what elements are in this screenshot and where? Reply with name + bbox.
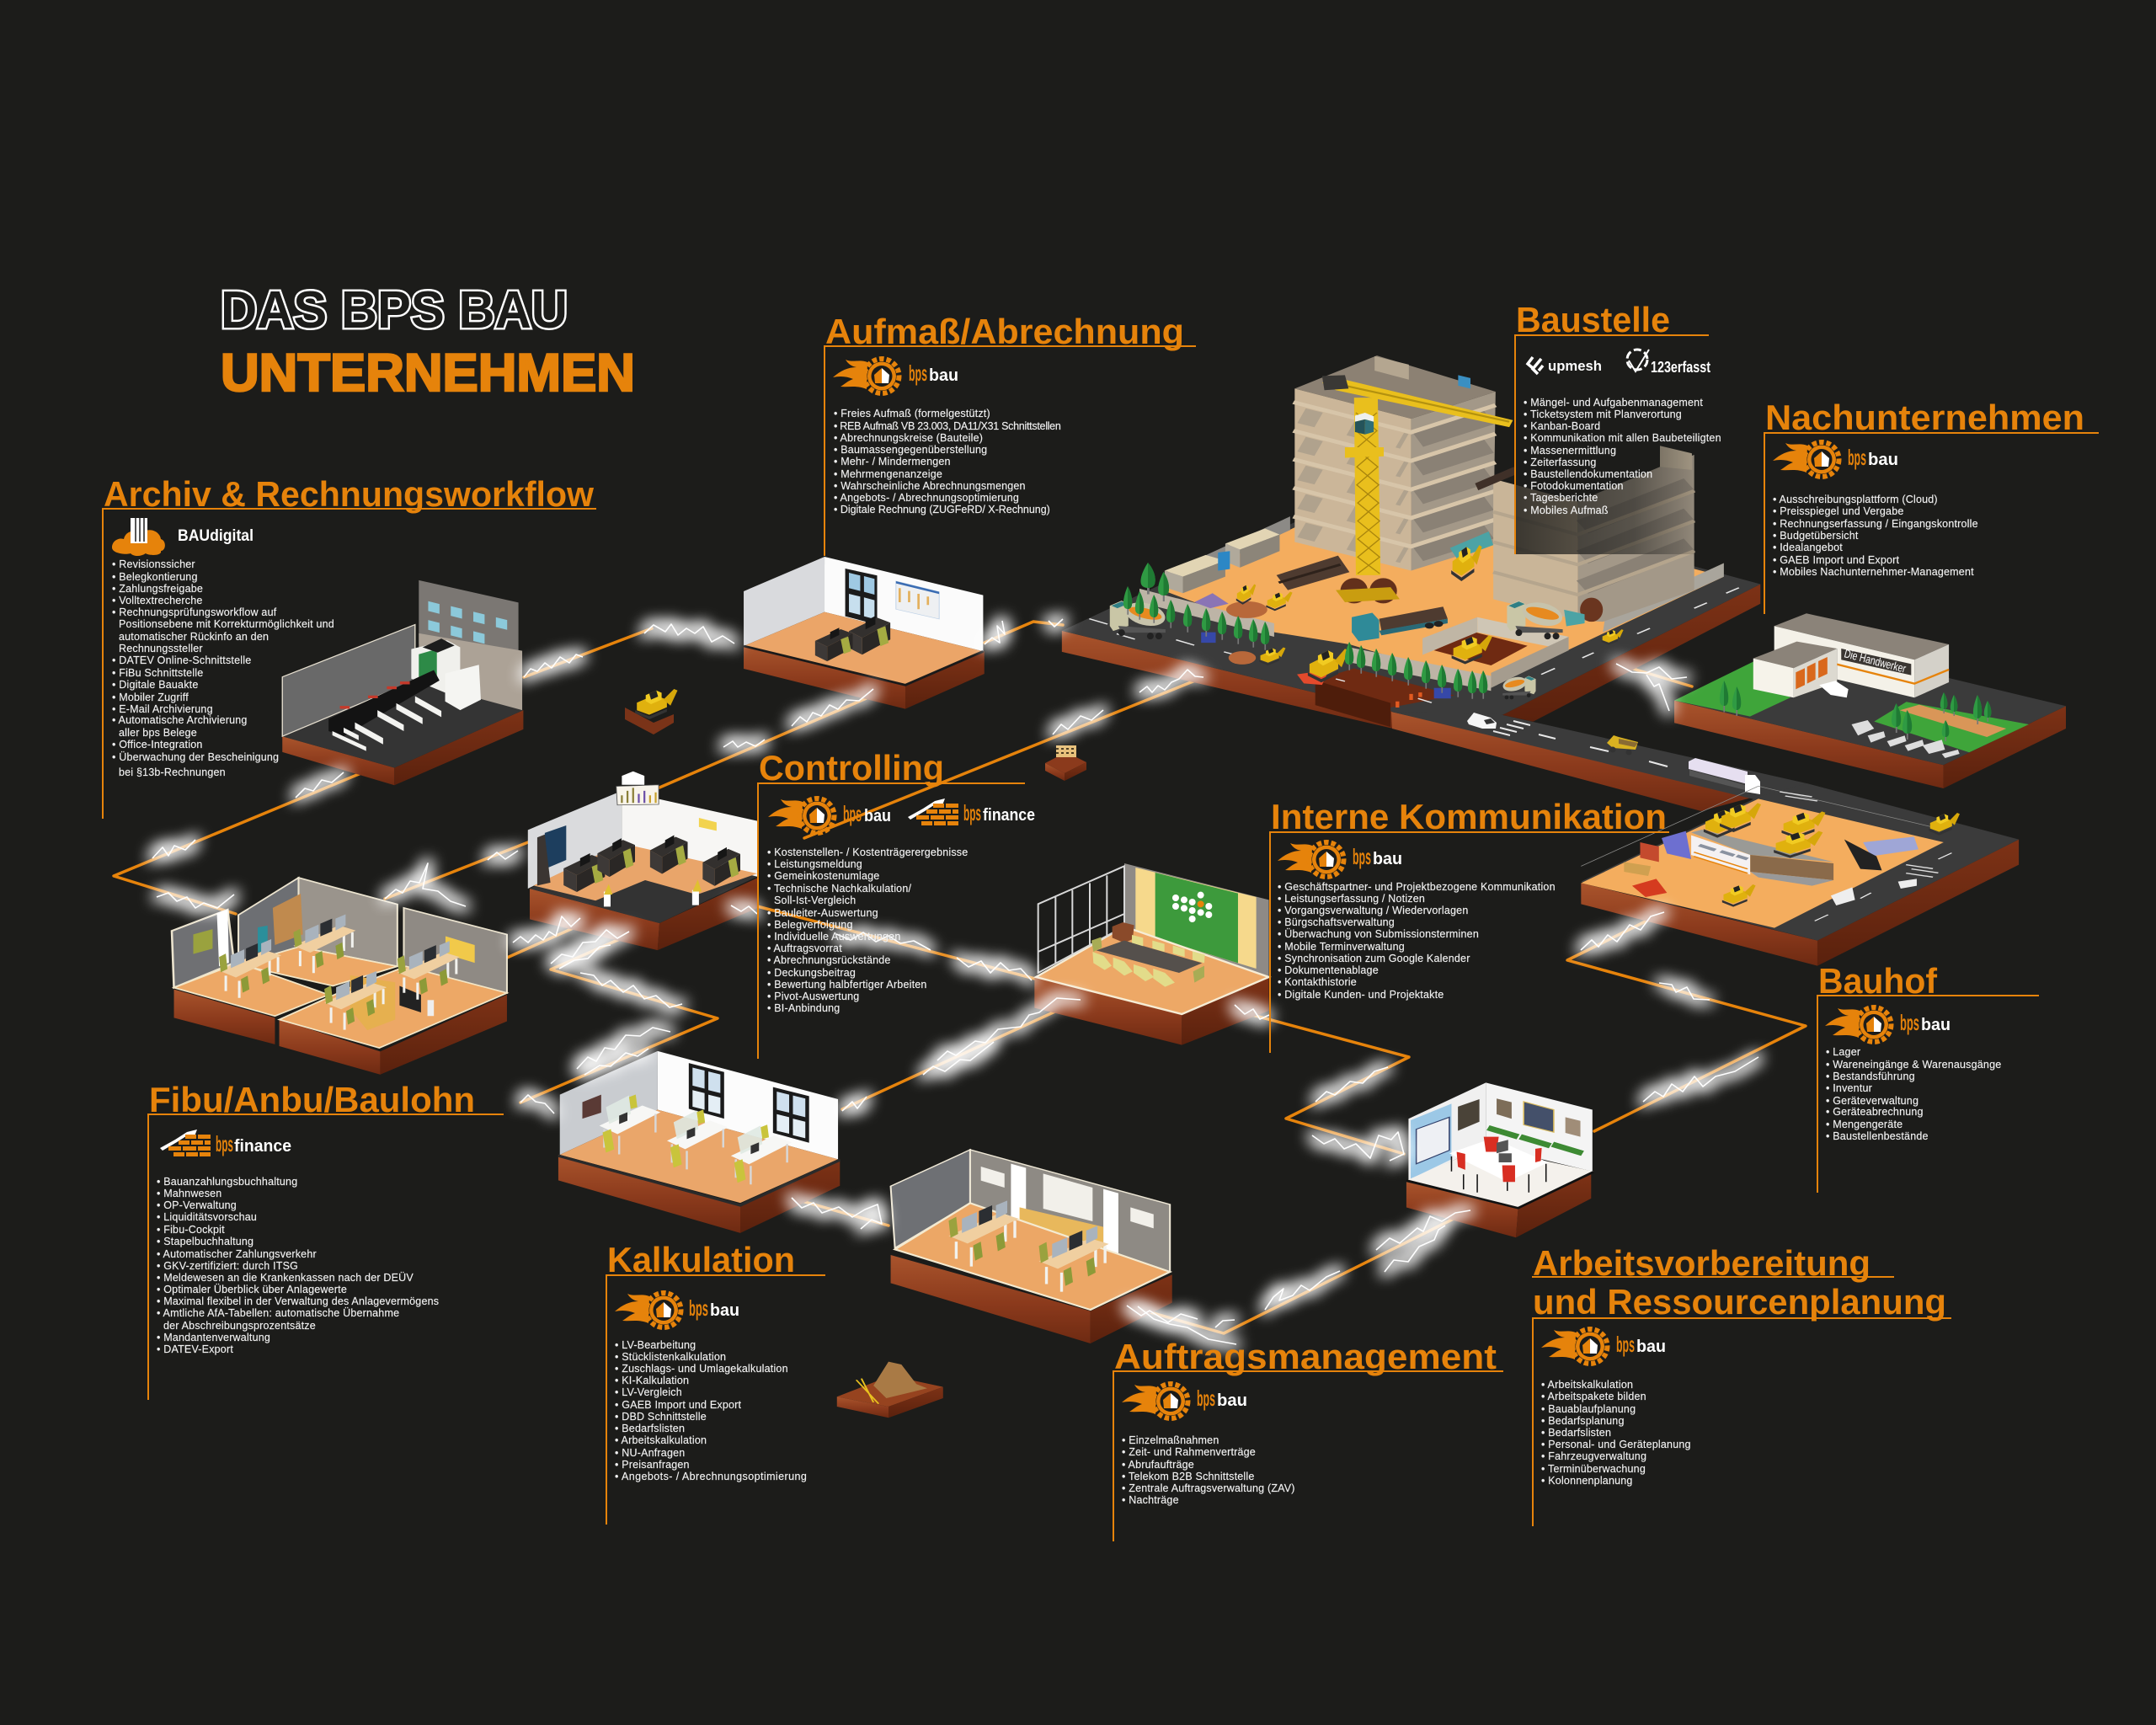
- feature list: • Geschäftspartner- und Projektbezogene Kommunikation: [1278, 881, 1556, 893]
- panel: Aufmaß/Abrechnung: [825, 312, 1196, 556]
- title: UNTERNEHMEN: [221, 344, 635, 403]
- feature list: • Fahrzeugverwaltung: [1541, 1450, 1646, 1462]
- feature list: • Dokumentenablage: [1278, 964, 1379, 976]
- feature list: automatischer Rückinfo an den: [119, 631, 269, 643]
- feature list: [1541, 1379, 1691, 1487]
- panel: Kalkulation: [606, 1240, 825, 1525]
- heading: Interne Kommunikation: [1271, 797, 1667, 836]
- feature list: • Bedarfslisten: [1541, 1427, 1611, 1439]
- feature list: • Bedarfsplanung: [1541, 1415, 1625, 1427]
- feature list: • NU-Anfragen: [615, 1447, 685, 1459]
- sand yard: [1581, 798, 1944, 928]
- truck: [1689, 758, 1760, 794]
- lawns: [1674, 661, 2029, 752]
- feature list: • Meldewesen an die Krankenkassen nach der DEÜV: [157, 1272, 414, 1284]
- desks: [948, 1200, 1109, 1292]
- feature list: • Überwachung der Bescheinigung: [112, 751, 279, 763]
- feature list: • Automatische Archivierung: [112, 714, 248, 726]
- panel: Archiv & Rechnungsworkflow: [103, 474, 596, 819]
- floor: [744, 612, 983, 685]
- feature list: • DATEV Online-Schnittstelle: [112, 654, 251, 666]
- feature list: • Preisspiegel und Vergabe: [1773, 505, 1904, 517]
- feature list: • Zahlungsfreigabe: [112, 583, 203, 595]
- feature list: • Geräteverwaltung: [1826, 1095, 1919, 1107]
- slab: [530, 843, 757, 923]
- logo: bps finance: finance: [234, 1137, 291, 1156]
- feature list: • Stapelbuchhaltung: [157, 1236, 253, 1247]
- feature list: [157, 1176, 439, 1355]
- feature list: • Stücklistenkalkulation: [615, 1351, 726, 1363]
- slab: [1674, 654, 2066, 788]
- windows: [583, 1063, 809, 1143]
- feature list: • Vorgangsverwaltung / Wiedervorlagen: [1278, 905, 1468, 916]
- floor: [1036, 927, 1269, 1014]
- diorama: Bauhof: [1581, 783, 2019, 966]
- floor: [895, 1203, 1170, 1310]
- feature list: • Abrechnungsrückstände: [767, 954, 891, 966]
- window cabinet: [537, 825, 566, 885]
- feature list: • Bedarfslisten: [615, 1423, 685, 1434]
- feature list: • Automatischer Zahlungsverkehr: [157, 1248, 317, 1260]
- overlay: Baustelle text panel: [1515, 335, 1713, 554]
- excavated pit: [1315, 669, 1454, 727]
- feature list: • FiBu Schnittstelle: [112, 667, 203, 679]
- logo: BAUdigital: BAUdigital: [178, 527, 253, 545]
- feature list: • Baustellenbestände: [1826, 1130, 1929, 1142]
- logo: bps bau: [1122, 1384, 1247, 1418]
- feature list: Positionsebene mit Korrekturmöglichkeit und: [119, 618, 334, 630]
- diorama: Baustelle construction site: [1062, 355, 1760, 729]
- feature list: • DATEV-Export: [157, 1343, 233, 1355]
- sand site ground: [1162, 486, 1724, 686]
- feature list: • Bewertung halbfertiger Arbeiten: [767, 979, 927, 991]
- feature list: • Personal- und Geräteplanung: [1541, 1439, 1691, 1450]
- feature list: • Bauleiter-Auswertung: [767, 907, 878, 919]
- feature list: • Digitale Kunden- und Projektakte: [1278, 989, 1444, 1001]
- logo: bps bau: bps: [843, 801, 862, 826]
- feature list: • Technische Nachkalkulation/: [767, 883, 911, 895]
- walls: [891, 1150, 1170, 1272]
- logo: bps finance: finance: [983, 806, 1035, 825]
- logo: bps bau: bps: [689, 1295, 708, 1321]
- feature list: [1278, 881, 1556, 1001]
- logo: bps bau: [1278, 842, 1402, 877]
- tree rows: [1123, 563, 1487, 699]
- title: DAS BPS BAU: [221, 281, 568, 339]
- feature list: • Rechnungserfassung / Eingangskontrolle: [1773, 518, 1978, 530]
- white van: [1467, 713, 1497, 729]
- window: [846, 569, 878, 625]
- feature list: • Revisionssicher: [112, 558, 195, 570]
- pipe truck: [1352, 606, 1448, 641]
- second building: [1493, 446, 1694, 622]
- feature list: • Individuelle Auswertungen: [767, 931, 901, 943]
- feature list: • Telekom B2B Schnittstelle: [1122, 1471, 1255, 1482]
- logo: bps bau: bps: [1197, 1386, 1215, 1411]
- feature list: • Geräteabrechnung: [1826, 1106, 1924, 1118]
- feature list: • GKV-zertifiziert: durch ITSG: [157, 1260, 298, 1272]
- feature list: • Digitale Bauakte: [112, 679, 198, 691]
- feature list: • GAEB Import und Export: [615, 1399, 742, 1411]
- logo: bps bau: bau: [710, 1301, 739, 1320]
- feature list: • Budgetübersicht: [1773, 530, 1859, 542]
- walls: [282, 580, 522, 736]
- feature list: • Tagesberichte: [1524, 492, 1598, 504]
- feature list: • Maximal flexibel in der Verwaltung des Anlagevermögens: [157, 1295, 439, 1307]
- soil: [1034, 977, 1269, 1045]
- road markings: [1089, 588, 1739, 702]
- feature list: • Kostenstellen- / Kostenträgerergebnisse: [767, 846, 968, 858]
- feature list: • Gemeinkostenumlage: [767, 870, 879, 882]
- heading: Nachunternehmen: [1765, 398, 2084, 437]
- diorama: road to Bauhof: [1391, 712, 1806, 811]
- feature list: • Einzelmaßnahmen: [1122, 1434, 1219, 1446]
- diorama: Kalkulation room: [558, 1051, 840, 1233]
- feature list: • Mobiles Nachunternehmer-Management: [1773, 566, 1974, 578]
- feature list: • Bauanzahlungsbuchhaltung: [157, 1176, 297, 1188]
- feature list: • Office-Integration: [112, 739, 203, 750]
- feature list: • Angebots- / Abrechnungsoptimierung: [834, 492, 1019, 504]
- sideboard: [350, 975, 434, 1030]
- feature list: [1773, 494, 1978, 578]
- slab asphalt: [1581, 783, 2019, 941]
- tile: excavator: [625, 689, 677, 734]
- feature list: • Massenermittlung: [1524, 445, 1616, 457]
- soil: [558, 1155, 840, 1233]
- feature list: [1524, 397, 1721, 516]
- logo: bps bau: bps: [1353, 844, 1371, 869]
- feature list: • Ausschreibungsplattform (Cloud): [1773, 494, 1938, 505]
- feature list: • Digitale Rechnung (ZUGFeRD/ X-Rechnung): [834, 504, 1050, 515]
- scanning machine: [328, 638, 481, 751]
- wood floor: [533, 843, 757, 900]
- diorama: conference room: [1034, 863, 1269, 1045]
- feature list: • REB Aufmaß VB 23.003, DA11/X31 Schnittstellen: [834, 420, 1061, 432]
- feature list: • Auftragsvorrat: [767, 943, 842, 954]
- feature list: • Amtliche AfA-Tabellen: automatische Übernahme: [157, 1307, 399, 1319]
- feature list: • LV-Vergleich: [615, 1386, 682, 1398]
- logo: bps bau: bau: [1921, 1016, 1951, 1034]
- feature list: • DBD Schnittstelle: [615, 1411, 707, 1423]
- feature list: • Zentrale Auftragsverwaltung (ZAV): [1122, 1482, 1295, 1494]
- soil: [174, 990, 507, 1075]
- feature list: • Volltextrecherche: [112, 595, 203, 606]
- feature list: • Mängel- und Aufgabenmanagement: [1524, 397, 1703, 409]
- feature list: • Kontakthistorie: [1278, 976, 1357, 988]
- logo: bps finance: [160, 1130, 291, 1156]
- feature list: • Belegverfolgung: [767, 919, 853, 931]
- table and chairs: [1091, 935, 1205, 987]
- feature list: • Mehrmengenanzeige: [834, 468, 942, 480]
- diorama: Archiv: [282, 580, 523, 785]
- feature list: • GAEB Import und Export: [1773, 554, 1900, 566]
- feature list: [767, 846, 968, 1014]
- company sign: Die Handwerker: [1843, 646, 1908, 676]
- feature list: • Freies Aufmaß (formelgestützt): [834, 408, 990, 419]
- tile: barrier: [1045, 745, 1086, 781]
- yard fence: [1581, 786, 1944, 866]
- panel: Auftragsmanagement: [1113, 1337, 1503, 1541]
- feature list: • Deckungsbeitrag: [767, 967, 856, 979]
- heading: Fibu/Anbu/Baulohn: [149, 1080, 475, 1119]
- feature list: • Belegkontierung: [112, 571, 198, 583]
- feature list: • Rechnungsprüfungsworkflow auf: [112, 606, 277, 618]
- heading: und Ressourcenplanung: [1533, 1282, 1946, 1322]
- logo: bps bau: bau: [864, 807, 891, 825]
- logo: bps bau: [1773, 442, 1898, 477]
- floor: [560, 1109, 838, 1203]
- feature list: Soll-Ist-Vergleich: [774, 895, 856, 906]
- feature list: • Kanban-Board: [1524, 420, 1600, 432]
- heading: Auftragsmanagement: [1114, 1337, 1497, 1376]
- logo: bps bau: bau: [1217, 1391, 1247, 1410]
- tall building: [1294, 355, 1496, 570]
- dump truck: [1607, 735, 1638, 755]
- logo: bps bau: [1541, 1329, 1666, 1364]
- logo: bps bau: [768, 798, 891, 833]
- tile floor: [1406, 1147, 1593, 1208]
- feature list: • KI-Kalkulation: [615, 1375, 689, 1386]
- feature list: • Inventur: [1826, 1082, 1872, 1094]
- cars: [1852, 720, 1960, 758]
- warehouse: [1624, 830, 1833, 897]
- site slab asphalt: [1062, 482, 1760, 722]
- walls: [172, 878, 507, 993]
- trees at Nachunternehmen: [1720, 681, 1991, 741]
- diorama: Auftragsmanagement room: [891, 1150, 1172, 1343]
- building: [1753, 613, 1949, 697]
- panel: Fibu/Anbu/Baulohn: [148, 1080, 504, 1400]
- panel: Nachunternehmen: [1764, 398, 2099, 614]
- feature list: • Mahnwesen: [157, 1188, 221, 1199]
- feature list: • Terminüberwachung: [1541, 1463, 1646, 1475]
- desks: [815, 616, 890, 661]
- logo: bps bau: bau: [1636, 1338, 1666, 1356]
- feature list: • Bauablaufplanung: [1541, 1403, 1636, 1415]
- desks: [600, 1095, 792, 1184]
- feature list: • Kolonnenplanung: [1541, 1475, 1633, 1487]
- feature list: • Leistungserfassung / Notizen: [1278, 893, 1425, 905]
- feature list: • Bestandsführung: [1826, 1071, 1915, 1082]
- feature list: • BI-Anbindung: [767, 1002, 840, 1014]
- feature list: • Optimaler Überblick über Anlagewerte: [157, 1284, 347, 1295]
- feature list: bei §13b-Rechnungen: [119, 766, 226, 778]
- soil: [891, 1255, 1172, 1343]
- feature list: [834, 408, 1061, 515]
- machinery: [1704, 803, 1960, 907]
- feature list: • Kommunikation mit allen Baubeteiligten: [1524, 432, 1721, 444]
- feature list: • Zeit- und Rahmenverträge: [1122, 1446, 1256, 1458]
- feature list: • Mobiler Zugriff: [112, 692, 189, 703]
- logo: bps bau: bps: [1900, 1010, 1919, 1035]
- glass wall: [1038, 866, 1124, 973]
- feature list: [112, 558, 334, 778]
- diorama: Controlling room: [528, 772, 757, 950]
- logo: 123erfasst: [1627, 350, 1710, 376]
- feature list: • Fotodokumentation: [1524, 480, 1624, 492]
- heading: Aufmaß/Abrechnung: [825, 312, 1184, 351]
- feature list: • OP-Verwaltung: [157, 1199, 237, 1211]
- feature list: • Nachträge: [1122, 1494, 1179, 1506]
- slab soil: [1581, 840, 2019, 966]
- feature list: der Abschreibungsprozentsätze: [163, 1320, 316, 1332]
- logo: upmesh: upmesh: [1548, 358, 1602, 374]
- feature list: • E-Mail Archivierung: [112, 703, 213, 715]
- feature list: • Zeiterfassung: [1524, 457, 1597, 468]
- feature list: • Mehr- / Mindermengen: [834, 456, 951, 467]
- logo: bps bau: bau: [1868, 451, 1898, 469]
- heading: Controlling: [759, 748, 944, 788]
- feature list: [615, 1339, 807, 1482]
- feature list: • Ticketsystem mit Planverortung: [1524, 409, 1682, 420]
- logo: bps bau: bau: [929, 366, 958, 385]
- feature list: • Liquiditätsvorschau: [157, 1211, 257, 1223]
- feature list: • Überwachung von Submissionsterminen: [1278, 928, 1479, 940]
- walls: [744, 557, 983, 651]
- panel: Controlling: [758, 748, 1035, 1059]
- heading: [1533, 1243, 1946, 1322]
- logo: bps finance: bps: [216, 1131, 233, 1156]
- feature list: • Wahrscheinliche Abrechnungsmengen: [834, 480, 1026, 492]
- building pit with retaining walls: [1422, 617, 1569, 688]
- back wall: [1124, 863, 1269, 977]
- feature list: • Angebots- / Abrechnungsoptimierung: [615, 1471, 807, 1482]
- wall chart: [896, 581, 939, 619]
- feature list: • Baustellendokumentation: [1524, 468, 1652, 480]
- feature list: • Abrufaufträge: [1122, 1459, 1194, 1471]
- chart board: [616, 772, 659, 805]
- diorama: Nachunternehmen: [1674, 613, 2066, 788]
- heading: Kalkulation: [607, 1240, 795, 1279]
- wood floors: [174, 947, 507, 1048]
- desks and plants: [563, 818, 740, 906]
- desk and red chairs: [1449, 1137, 1548, 1193]
- logo: bps bau: bps: [1848, 445, 1866, 470]
- site slab soil: [1062, 585, 1760, 729]
- feature list: • Zuschlags- und Umlagekalkulation: [615, 1363, 788, 1375]
- feature list: • Fibu-Cockpit: [157, 1224, 225, 1236]
- soil: [282, 710, 523, 785]
- panel: Baustelle: [1515, 300, 1721, 554]
- tower crane: [1322, 375, 1513, 602]
- logo: bps finance: bps: [963, 800, 981, 825]
- heading: Archiv & Rechnungsworkflow: [104, 474, 594, 514]
- walls: [528, 791, 757, 889]
- logo: 123erfasst: 123erfasst: [1651, 359, 1710, 376]
- machines: [1110, 545, 1624, 708]
- feature list: • Arbeitskalkulation: [615, 1434, 707, 1446]
- feature list: Rechnungssteller: [119, 643, 203, 654]
- walls: [560, 1051, 838, 1159]
- back fence: [1162, 516, 1724, 633]
- logo: bps bau: bps: [909, 360, 927, 386]
- logo: bps bau: [833, 359, 958, 393]
- desks: [219, 915, 460, 1030]
- panel: Bauhof: [1817, 961, 2039, 1193]
- logo: bps bau: bps: [1616, 1332, 1635, 1357]
- feature list: • Mengengeräte: [1826, 1119, 1903, 1130]
- feature list: • Leistungsmeldung: [767, 858, 862, 870]
- lightning bolts: [152, 619, 1758, 1344]
- feature list: • Synchronisation zum Google Kalender: [1278, 953, 1470, 964]
- logo: bps bau: [1825, 1007, 1951, 1042]
- logo dots: [1172, 892, 1212, 922]
- panel: Arbeitsvorbereitung und Ressourcenplanung: [1532, 1243, 1951, 1526]
- heading: Bauhof: [1818, 961, 1938, 1001]
- diorama: Aufmaß room: [744, 557, 985, 709]
- floor: [282, 681, 523, 768]
- feature list: • Arbeitskalkulation: [1541, 1379, 1633, 1391]
- feature list: • Pivot-Auswertung: [767, 991, 859, 1002]
- site containers and pipes: [1165, 467, 1603, 685]
- logo: upmesh: [1528, 357, 1602, 374]
- walls: [1408, 1082, 1593, 1180]
- front fences: [1139, 589, 1491, 691]
- feature list: • Preisanfragen: [615, 1459, 690, 1471]
- panel: Interne Kommunikation: [1270, 797, 1669, 1053]
- feature list: [1122, 1434, 1295, 1506]
- feature list: aller bps Belege: [119, 727, 197, 739]
- heading: Arbeitsvorbereitung: [1533, 1243, 1870, 1283]
- chest: [1113, 922, 1134, 943]
- feature list: • Lager: [1826, 1046, 1860, 1058]
- feature list: • Wareneingänge & Warenausgänge: [1826, 1059, 2001, 1071]
- soil: [1406, 1174, 1591, 1237]
- feature list: • Mobile Terminverwaltung: [1278, 941, 1405, 953]
- logo: bps bau: bau: [1373, 850, 1402, 868]
- connection lines: [114, 622, 1806, 1333]
- feature list: • Idealangebot: [1773, 542, 1843, 553]
- feature list: • Bürgschaftsverwaltung: [1278, 916, 1395, 928]
- feature list: • Mobiles Aufmaß: [1524, 505, 1609, 516]
- heading: Baustelle: [1516, 300, 1670, 339]
- feature list: • Arbeitspakete bilden: [1541, 1391, 1646, 1402]
- soil: [530, 878, 757, 950]
- logo: bps finance: [908, 798, 1035, 825]
- tile: sand hill: [837, 1362, 943, 1418]
- soil: [744, 646, 985, 709]
- feature list: [1826, 1046, 2001, 1142]
- feature list: • Baumassengegenüberstellung: [834, 444, 987, 456]
- crosswalk: [1780, 792, 1938, 877]
- feature list: • LV-Bearbeitung: [615, 1339, 696, 1351]
- feature list: • Abrechnungskreise (Bauteile): [834, 432, 983, 444]
- diorama: Arbeitsvorbereitung room: [1406, 1082, 1593, 1237]
- logo: BAUdigital: [112, 518, 253, 556]
- logo: bps bau: [615, 1293, 739, 1327]
- diorama: Fibu room: [172, 878, 507, 1075]
- feature list: • Mandantenverwaltung: [157, 1332, 270, 1343]
- title: [221, 281, 635, 403]
